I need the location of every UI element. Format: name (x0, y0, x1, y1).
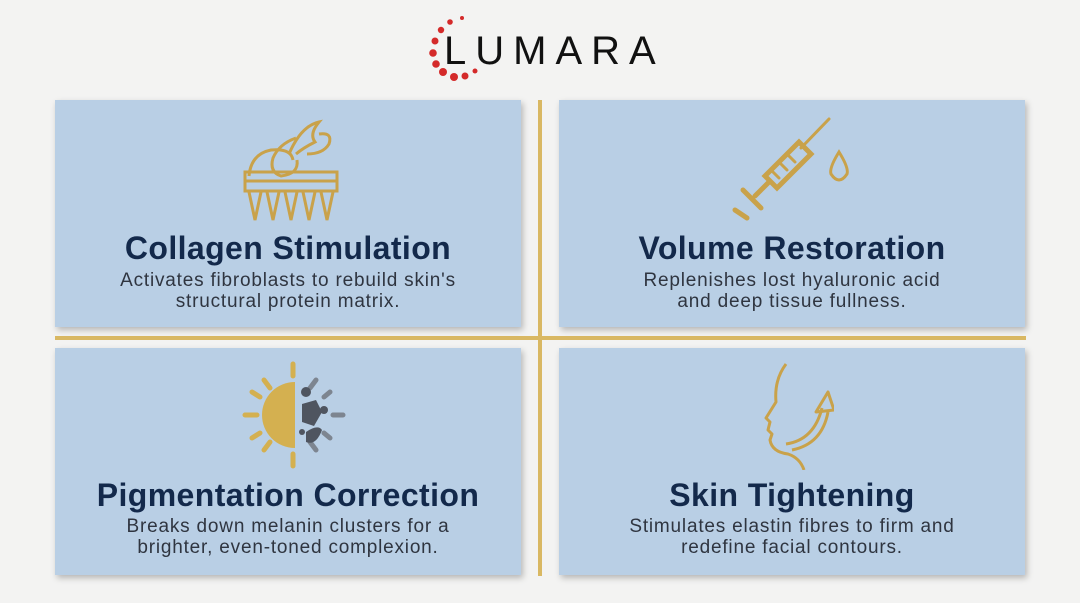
description: and deep tissue fullness. (677, 291, 907, 312)
heading: Collagen Stimulation (125, 230, 451, 266)
logo (429, 16, 665, 81)
description: redefine facial contours. (681, 537, 903, 558)
description: Replenishes lost hyaluronic acid (643, 270, 941, 291)
icon: microneedle (244, 120, 338, 220)
description: Activates fibroblasts to rebuild skin's (120, 270, 456, 291)
description: Stimulates elastin fibres to firm and (629, 516, 955, 537)
icon: dot arc (429, 16, 478, 81)
description (120, 270, 456, 312)
description (629, 516, 955, 558)
description (127, 516, 449, 558)
panel: pigmentation correction (55, 348, 521, 575)
divider lines gold (538, 100, 542, 576)
description: structural protein matrix. (176, 291, 400, 312)
heading: Pigmentation Correction (97, 477, 479, 513)
brand name: LUMARA (444, 29, 665, 73)
heading: Volume Restoration (638, 230, 946, 266)
panel: collagen stimulation (55, 100, 521, 327)
panel: volume restoration (559, 100, 1025, 327)
icon: face profile with arrow (764, 363, 834, 470)
description (643, 270, 941, 312)
description: brighter, even-toned complexion. (137, 537, 439, 558)
panel: skin tightening (559, 348, 1025, 575)
description: Breaks down melanin clusters for a (127, 516, 449, 537)
icon: syringe with drop (732, 117, 849, 220)
icon: half sun half pigment (242, 362, 346, 468)
heading: Skin Tightening (669, 477, 915, 513)
